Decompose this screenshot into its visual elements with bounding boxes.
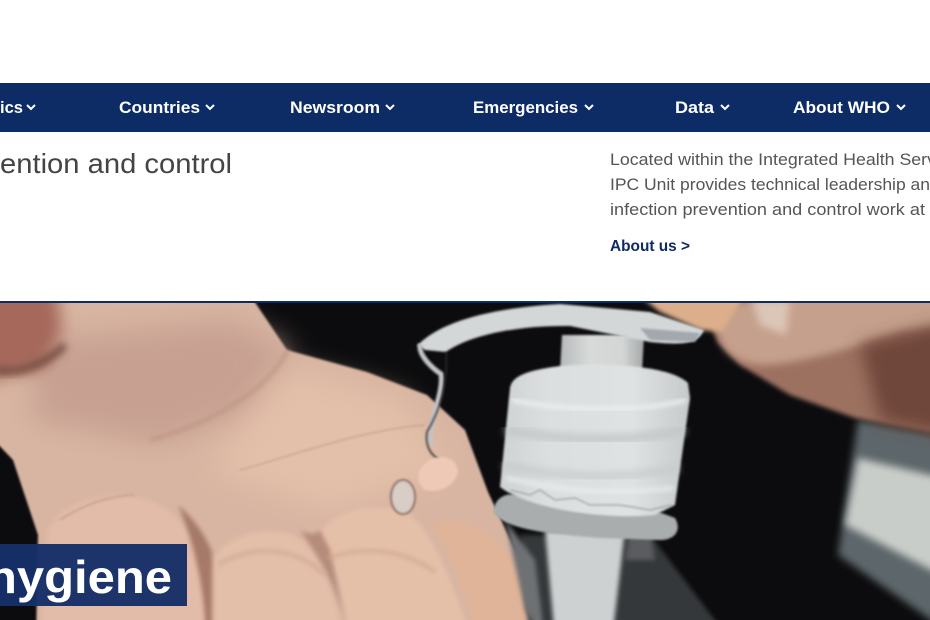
page title: ention and control <box>0 148 232 179</box>
right hand pressing pump <box>640 295 930 438</box>
nav item: Countries: Countries <box>119 98 200 117</box>
nav item: Data: Data <box>675 98 715 117</box>
palm of left hand <box>0 303 520 620</box>
hero photo: hand sanitizer pump over palm <box>0 280 930 620</box>
link: About us: About us > <box>610 238 690 255</box>
pump cap <box>500 364 690 516</box>
nav item: Data <box>675 98 729 117</box>
intro text block: Located within the Integrated Health Serv <box>610 150 930 169</box>
intro text block <box>610 150 930 219</box>
intro text block: infection prevention and control work at <box>610 200 925 219</box>
pump stem <box>560 335 644 372</box>
nav item: About WHO: About WHO <box>793 98 890 117</box>
blurred background object, right <box>838 420 930 620</box>
pump nozzle <box>418 304 704 352</box>
gel stream <box>391 344 458 514</box>
bottle body <box>505 520 730 620</box>
intro text block: IPC Unit provides technical leadership an <box>610 175 930 194</box>
nav item: Topics (clipped): ics <box>0 98 23 117</box>
nav item: Emergencies: Emergencies <box>473 98 578 117</box>
fingers <box>40 495 556 620</box>
bottle collar <box>493 494 678 540</box>
nav item: Topics (clipped) <box>0 98 35 117</box>
navigation bar <box>0 83 930 132</box>
photo top rule <box>0 301 930 303</box>
nav item: Newsroom: Newsroom <box>290 98 380 117</box>
